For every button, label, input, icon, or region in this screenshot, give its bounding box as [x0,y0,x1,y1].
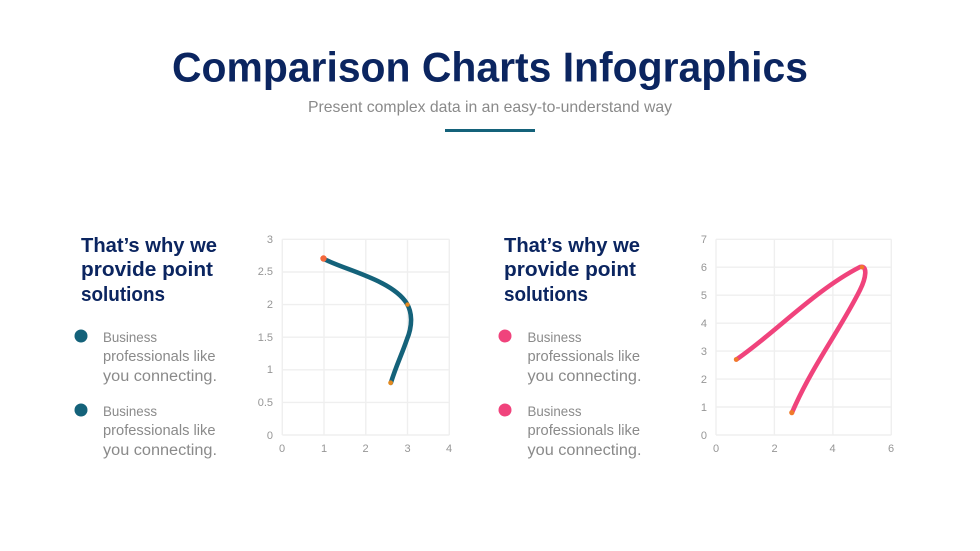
left bullet icon 2 [74,404,88,416]
right bullet text 2: professionals like [528,423,640,439]
left y axis labels: 1 [267,364,273,376]
left y axis labels: 0.5 [258,397,273,409]
right curve [736,267,865,413]
left y axis labels [258,234,273,442]
right bullet text 2: you connecting. [528,442,642,459]
left x axis labels: 1 [321,443,327,455]
title underline [445,129,535,132]
left bullet text 2: professionals like [103,423,216,439]
right bullet icon 1 [498,330,512,342]
right y axis labels: 5 [701,290,707,302]
left y axis labels: 3 [267,234,273,246]
left heading: solutions [81,283,165,306]
right bullet icon 2 [498,404,512,416]
right x axis labels: 0 [713,443,719,455]
left bullet text 2 [103,403,217,459]
left x axis labels: 4 [446,443,452,455]
right y axis labels: 7 [701,234,707,246]
left bullet text 2: you connecting. [103,442,217,459]
left bullet text 1: Business [103,329,157,345]
chart: right scatter [701,234,894,455]
right bullet text 1: Business [528,329,582,345]
left bullet text 1: professionals like [103,349,216,365]
right bullet text 2: Business [528,403,582,419]
left curve [324,259,411,383]
right y axis labels: 1 [701,402,707,414]
left x axis labels: 0 [279,443,285,455]
left heading: provide point [81,258,213,281]
left y axis labels: 2.5 [258,266,273,278]
left x axis labels [279,443,452,455]
right y axis labels: 2 [701,374,707,386]
title: Comparison Charts Infographics [172,44,808,90]
right x axis labels: 6 [888,443,894,455]
left x axis labels: 3 [404,443,411,455]
right data points [734,265,864,415]
left data points [320,255,410,385]
right heading: provide point [504,258,636,281]
right bullet text 1: you connecting. [528,368,642,385]
right bullet text 1 [528,329,642,385]
right heading [504,234,640,306]
subtitle: Present complex data in an easy-to-understand way [308,99,672,116]
right heading: solutions [504,283,588,306]
right x axis labels: 4 [829,443,836,455]
right y axis labels: 6 [701,262,707,274]
left bullet text 1: you connecting. [103,368,217,385]
right bullet text 2 [528,403,642,459]
left heading [81,234,217,306]
right bullet text 1: professionals like [528,349,640,365]
right y axis labels: 3 [701,346,707,358]
left bullet text 2: Business [103,403,157,419]
panel: left text [74,234,217,459]
panel: right text [498,234,642,459]
left bullet icon 1 [74,330,88,342]
left heading: That’s why we [81,234,217,257]
right y axis labels: 4 [701,318,707,330]
chart: left scatter [258,234,452,455]
right x axis labels: 2 [771,443,778,455]
right x axis labels [713,443,894,455]
right y axis labels: 0 [701,430,707,442]
right y axis labels [701,234,707,442]
left y axis labels: 2 [267,299,273,311]
left y axis labels: 1.5 [258,332,273,344]
left x axis labels: 2 [362,443,369,455]
left y axis labels: 0 [267,430,273,442]
left bullet text 1 [103,329,217,385]
right heading: That’s why we [504,234,640,257]
